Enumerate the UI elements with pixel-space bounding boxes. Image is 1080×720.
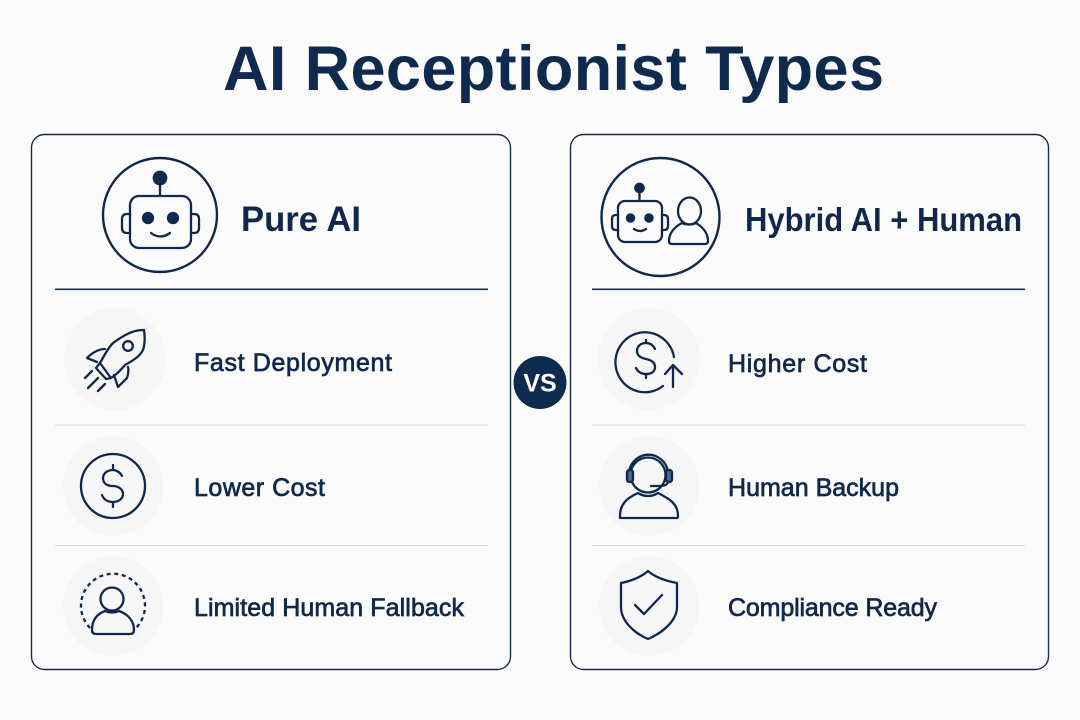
label: Limited Human Fallback: [194, 594, 464, 622]
row: Lower Cost: [63, 436, 325, 536]
label: Lower Cost: [194, 474, 325, 502]
label: Compliance Ready: [728, 594, 938, 622]
VS badge: [514, 356, 566, 409]
icon: robot and person in circle: [602, 158, 720, 276]
label: Fast Deployment: [194, 349, 392, 377]
icon: shield with check: [599, 556, 699, 656]
title: AI Receptionist Types: [223, 34, 884, 104]
icon: robot in circle: [103, 158, 217, 272]
VS badge: VS: [523, 370, 557, 398]
icon: rocket: [64, 308, 166, 410]
icon: dollar coin: [63, 436, 163, 536]
heading: Pure AI: Pure AI: [241, 200, 361, 239]
icon: headset agent: [599, 436, 699, 536]
row: Higher Cost: [598, 308, 867, 410]
panel: Hybrid AI + Human: [570, 134, 1048, 670]
row: Fast Deployment: [64, 308, 392, 410]
label: Higher Cost: [728, 350, 867, 378]
icon: person in dashed circle: [63, 556, 163, 656]
label: Human Backup: [728, 474, 899, 502]
row: Compliance Ready: [599, 556, 938, 656]
heading: Hybrid AI + Human: Hybrid AI + Human: [745, 201, 1022, 238]
row: Human Backup: [599, 436, 899, 536]
icon: dollar with up arrow: [598, 308, 700, 410]
row: Limited Human Fallback: [63, 556, 464, 656]
panel: Pure AI: [32, 134, 510, 670]
